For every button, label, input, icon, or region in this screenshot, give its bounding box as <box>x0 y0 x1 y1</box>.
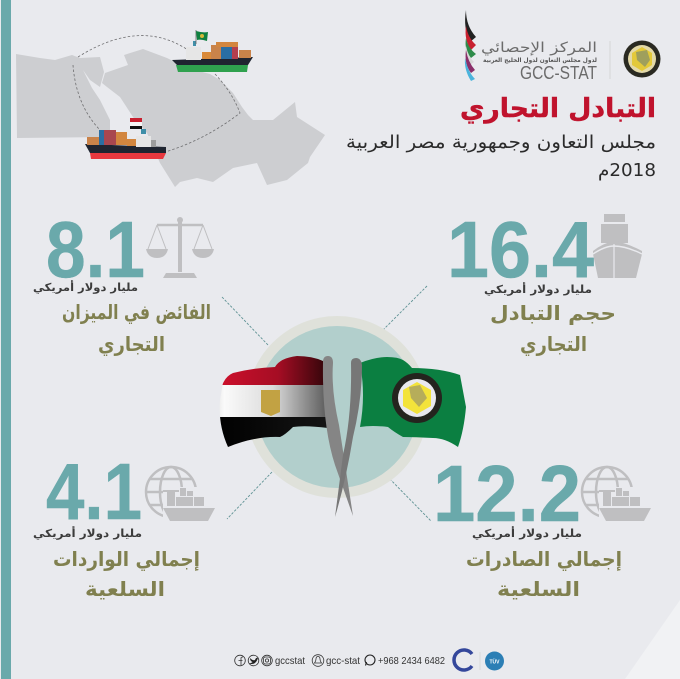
unit: مليار دولار أمريكي <box>33 526 142 540</box>
icon: globe and cargo ship <box>146 467 215 521</box>
value: 16.4 <box>447 205 594 294</box>
centre graphic: flags and circle <box>215 316 466 517</box>
subtitle: مجلس التعاون وجمهورية مصر العربية <box>346 132 656 153</box>
value: 12.2 <box>433 449 581 538</box>
inner circle <box>256 326 418 488</box>
label line 2: التجاري <box>98 332 165 357</box>
map with ships <box>16 30 325 187</box>
value: 4.1 <box>46 447 142 536</box>
label line 1: إجمالي الواردات <box>53 547 200 572</box>
GCC flag emblem <box>392 373 442 423</box>
logo ribbon <box>465 10 476 81</box>
connector lines <box>222 286 431 521</box>
stat: imports <box>33 447 215 601</box>
footer: social and certification <box>235 650 504 670</box>
flag: Egypt <box>220 356 327 447</box>
TUV badge <box>485 652 504 670</box>
logo Arabic subtitle: لدول مجلس التعاون لدول الخليج العربية <box>483 57 597 64</box>
icon: scales <box>146 217 214 278</box>
decorative light corner <box>625 600 680 679</box>
crossing pens <box>323 356 353 516</box>
icon: whatsapp <box>365 655 375 666</box>
unit: مليار دولار أمريكي <box>484 282 592 296</box>
icon: ship <box>593 214 642 278</box>
year: 2018م <box>598 160 656 181</box>
map: Arab peninsula <box>102 49 325 187</box>
outer ring <box>246 316 428 498</box>
icon: twitter <box>248 655 259 666</box>
phone number: +968 2434 6482 <box>378 655 445 667</box>
GCC emblem <box>624 40 660 78</box>
unit: مليار دولار أمريكي <box>472 526 582 540</box>
value: 8.1 <box>46 205 145 294</box>
ship: Egypt <box>85 118 166 159</box>
TUV text: TÜV <box>490 658 500 666</box>
dashed shipping routes <box>73 36 240 152</box>
title: التبادل التجاري <box>460 94 656 124</box>
handle: gcc-stat: gcc-stat <box>326 655 360 667</box>
logo: GCC-STAT <box>465 10 660 83</box>
label line 1: حجم التبادل <box>490 301 616 325</box>
flag: GCC <box>360 357 466 447</box>
icon: facebook <box>235 655 245 666</box>
icon: globe and cargo ship <box>582 467 651 521</box>
handle: gccstat: gccstat <box>275 655 305 667</box>
label line 1: إجمالي الصادرات <box>466 547 622 572</box>
unit: مليار دولار أمريكي <box>33 280 138 294</box>
label line 1: الفائض في الميزان <box>62 300 211 325</box>
logo Arabic name: المركز الإحصائي <box>481 40 597 56</box>
icon: instagram <box>262 655 272 666</box>
label line 2: السلعية <box>497 577 580 601</box>
certification mark <box>454 650 472 670</box>
label line 2: السلعية <box>85 577 165 601</box>
stat: exports <box>433 449 651 601</box>
left teal bar <box>1 0 11 679</box>
label line 2: التجاري <box>520 332 587 357</box>
ship: GCC <box>172 30 253 72</box>
stat: trade volume <box>447 205 642 357</box>
logo GCC-STAT wordmark: GCC-STAT <box>520 63 597 83</box>
stat: trade surplus <box>33 205 214 357</box>
icon: snapchat <box>312 655 324 666</box>
map: Egypt <box>16 54 110 138</box>
